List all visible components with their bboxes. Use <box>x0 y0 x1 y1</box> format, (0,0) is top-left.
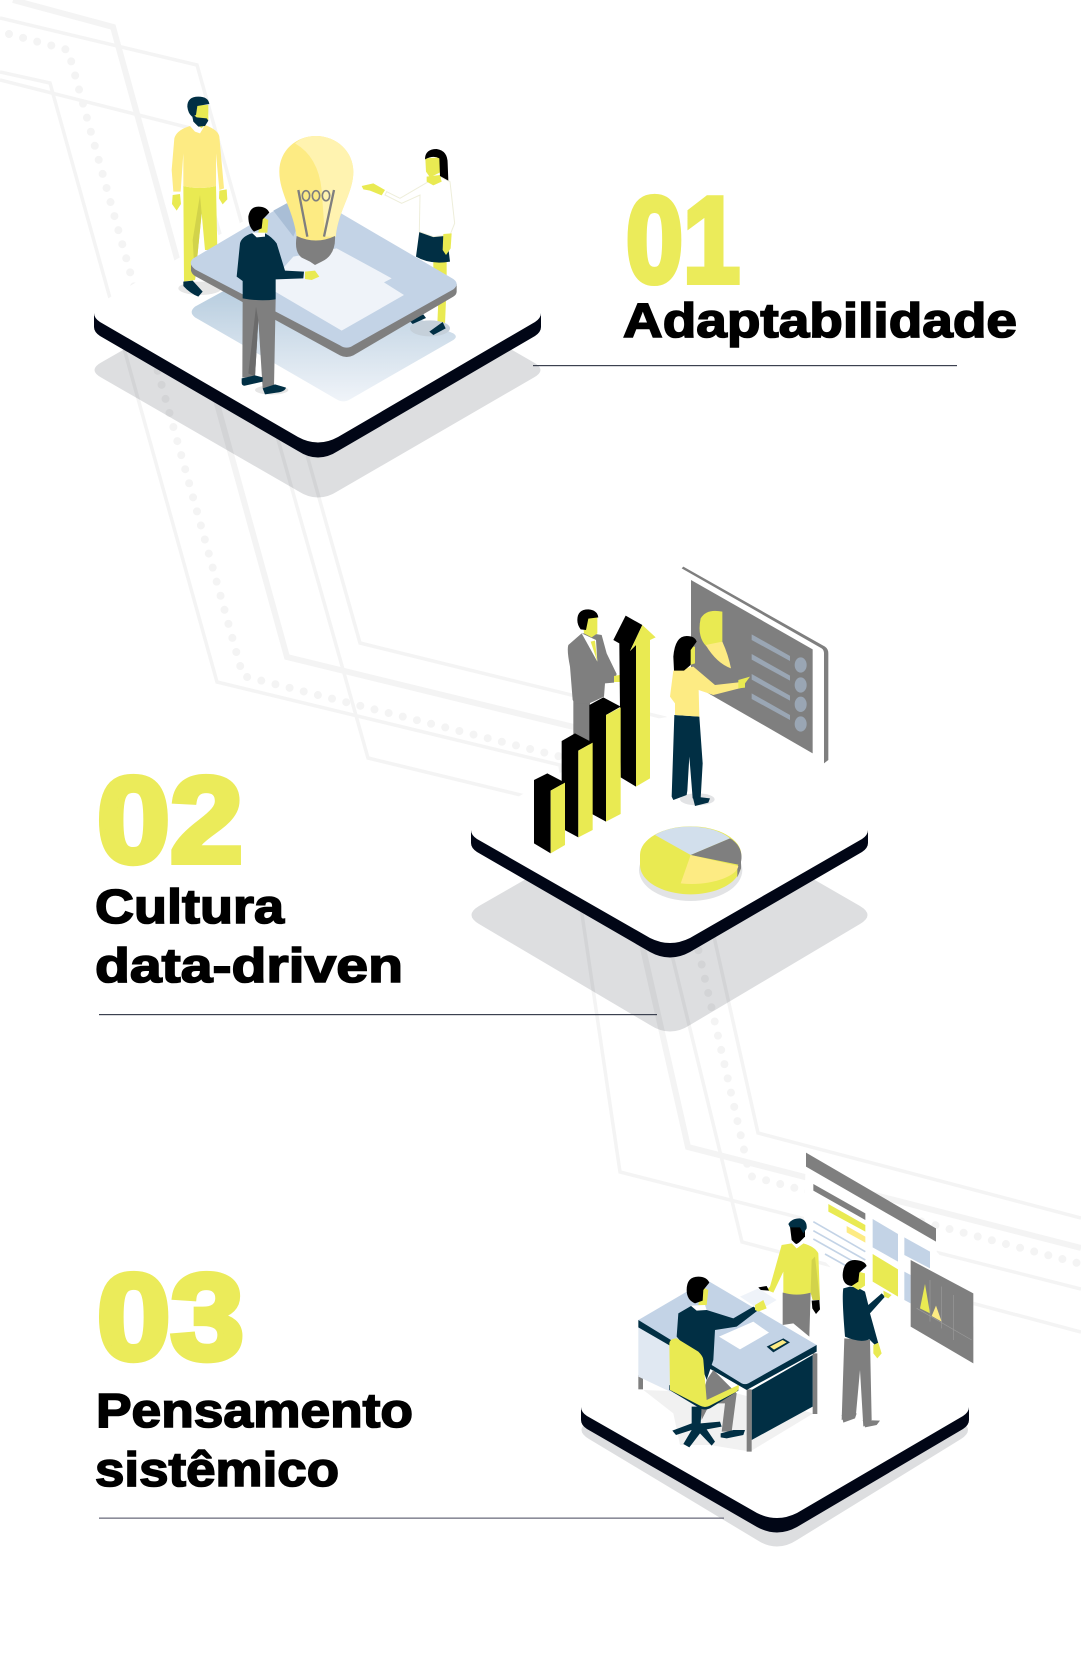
office chair <box>669 1338 739 1447</box>
number 02: 02 <box>97 752 243 888</box>
platform 2 <box>471 717 868 1032</box>
woman with skirt <box>362 149 455 336</box>
table <box>191 192 457 357</box>
bar chart with arrow <box>534 616 656 853</box>
pie chart <box>639 826 742 901</box>
heading Cultura: Cultura <box>95 881 284 934</box>
presentation panel <box>680 567 828 765</box>
man in suit <box>568 609 630 743</box>
seated man <box>677 1277 767 1438</box>
number 03: 03 <box>97 1249 244 1385</box>
man seen from behind <box>237 207 319 395</box>
desk <box>638 1280 817 1452</box>
heading data-driven: data-driven <box>95 940 403 993</box>
woman with bob hair <box>842 1260 892 1427</box>
divider 2 <box>99 1014 657 1015</box>
heading Pensamento: Pensamento <box>96 1385 413 1438</box>
man with beard <box>172 97 227 297</box>
platform 1 <box>94 185 541 498</box>
illustration: data presentation <box>534 567 828 901</box>
light bulb <box>279 136 353 265</box>
heading sistêmico: sistêmico <box>95 1444 339 1497</box>
divider 1 <box>533 365 957 366</box>
floor reflection <box>192 260 456 401</box>
number 01: 01 <box>626 172 740 308</box>
wall display <box>803 1153 973 1363</box>
illustration: people around light bulb <box>172 97 457 401</box>
platform 3 <box>581 1294 969 1546</box>
heading Adaptabilidade: Adaptabilidade <box>623 295 1017 348</box>
standing man in yellow <box>758 1218 820 1337</box>
woman pointing <box>670 636 750 806</box>
illustration: systems thinking team <box>638 1153 973 1452</box>
divider 3 <box>99 1518 724 1519</box>
